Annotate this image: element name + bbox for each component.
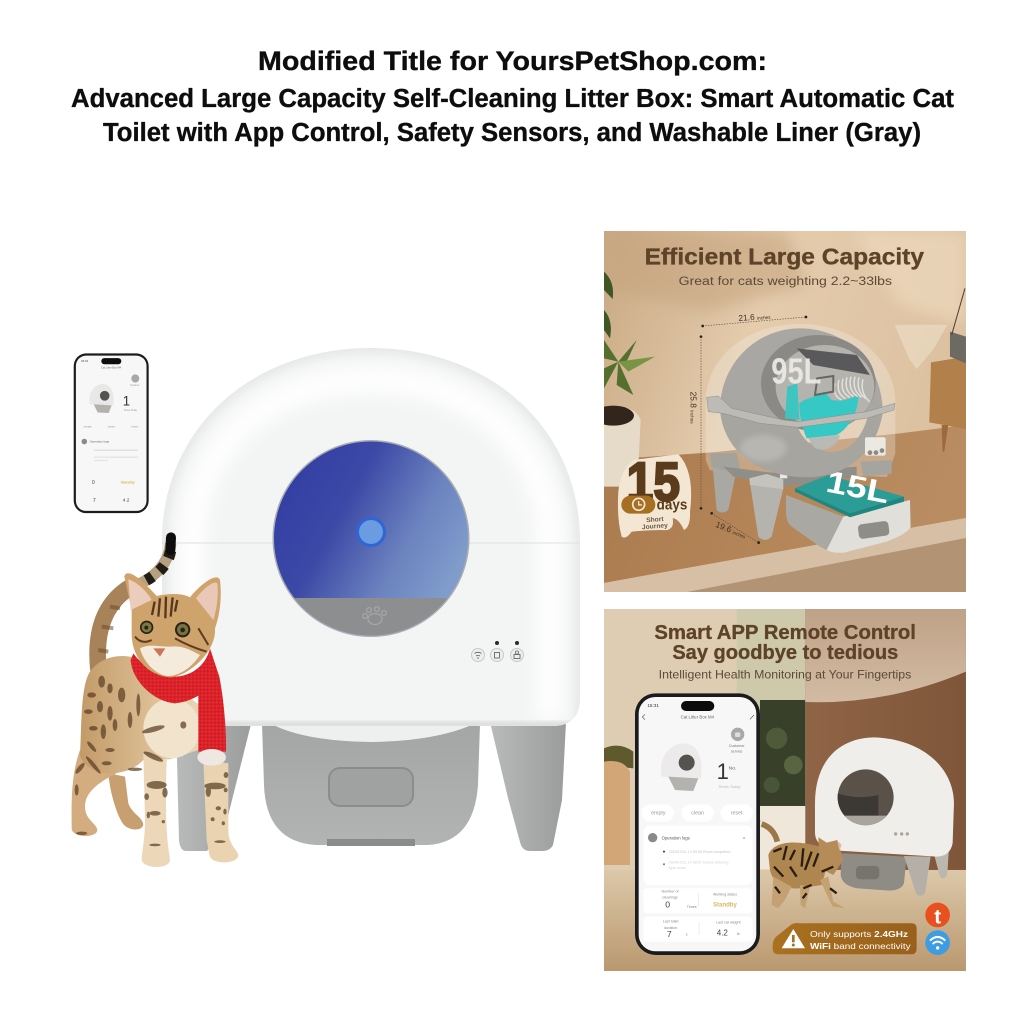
wood wall: [805, 609, 966, 871]
blue button: [356, 517, 386, 547]
panel: efficient large capacity: [593, 231, 966, 592]
phone app mockup: clean: [108, 424, 115, 429]
coat spots: [74, 676, 228, 846]
15 days badge: Short: [646, 516, 665, 524]
drawer handle: [329, 768, 413, 806]
cat with red scarf: [72, 537, 238, 867]
times today: [717, 759, 741, 789]
mini litter box: [815, 737, 954, 896]
panel heading: [654, 621, 916, 664]
times today: No.: [729, 765, 736, 771]
15 days badge: Journey: [642, 522, 668, 531]
title: [71, 46, 955, 147]
near hind leg: [72, 733, 117, 836]
status cards: Last toilet: [663, 920, 678, 924]
95L label: 95L: [771, 350, 821, 391]
operation logs: 2024/12/11 14 58:07 Device entering: [669, 861, 728, 865]
wifi warning badge: Only supports 2.4GHz: [810, 929, 909, 939]
rim: [707, 396, 895, 427]
phone app mockup: Operation logs: [90, 440, 110, 444]
table front: [687, 538, 966, 592]
action buttons: clean: [691, 811, 704, 817]
title: Modified Title for YoursPetShop.com:: [258, 46, 767, 76]
front leg left: [142, 753, 170, 867]
top curved overlay: [805, 609, 966, 702]
mini product image: [661, 743, 702, 791]
drawer 15L: [786, 465, 911, 553]
dimension: width: 21.6 inches: [738, 311, 771, 323]
operation logs: 2024/12/11 14 59:05 Reset completed: [669, 850, 730, 854]
sofa: [604, 746, 633, 865]
15 days badge: [618, 450, 691, 538]
status cards: 0: [665, 899, 670, 909]
wall background: [604, 231, 966, 592]
dimension: width: [701, 314, 808, 328]
phone app mockup: reset: [131, 424, 138, 429]
customer service: service: [731, 749, 742, 753]
status bar: 15:31: [647, 703, 659, 708]
potted plant: [604, 272, 655, 487]
action buttons: reset: [731, 811, 743, 817]
legs: [713, 467, 737, 512]
lower bowl: [720, 410, 883, 477]
operation logs: Operation logs: [662, 835, 690, 840]
control buttons: [472, 641, 524, 662]
times today: 1: [717, 759, 729, 784]
15 days badge: days: [657, 498, 687, 514]
valves: [861, 437, 892, 477]
phone app mockup: 7: [93, 498, 96, 504]
room background: [604, 609, 806, 870]
phone app mockup: 0: [92, 480, 95, 486]
dimension: depth: [710, 512, 760, 544]
wifi logo: [925, 930, 950, 955]
tuya logo: [925, 903, 950, 928]
status cards: Number of: [661, 890, 680, 894]
panel subheading: Intelligent Health Monitoring at Your Fingertips: [659, 668, 911, 681]
wood table top: [604, 425, 966, 583]
phone app mockup: [635, 693, 760, 955]
phone app mockup: 1: [123, 394, 130, 409]
tail: [98, 537, 171, 668]
comb: [815, 376, 870, 402]
phone app mockup: 15:31: [81, 359, 89, 363]
floor: [604, 870, 966, 972]
action buttons: empty: [651, 811, 666, 817]
status cards: Working status: [713, 893, 737, 897]
status cards: Standby: [713, 903, 737, 909]
hanging glass shade: [894, 324, 948, 370]
drawer white band: [268, 722, 478, 742]
waste drawer: [262, 724, 480, 845]
status cards: Last cat weight: [716, 920, 741, 924]
wifi warning badge: [773, 923, 917, 954]
walking cat: [760, 820, 844, 908]
phone app mockup: [74, 353, 149, 513]
dome body: [162, 348, 580, 726]
status cards: cleanings: [662, 895, 678, 899]
times today: Times Today: [718, 784, 741, 789]
tuya logo: t: [934, 905, 941, 928]
wifi warning badge: WiFi band connectivity: [810, 941, 911, 951]
body seam: [162, 542, 580, 544]
panel heading: Smart APP Remote Control: [654, 621, 916, 644]
far hind leg: [108, 773, 143, 829]
operation logs: type mode: [669, 866, 686, 870]
front leg right: [203, 760, 238, 862]
phone app mockup: 4.2: [123, 497, 130, 503]
scarf: [131, 648, 226, 766]
paw icon: [363, 607, 386, 624]
operation logs: [643, 826, 753, 885]
status cards: 4.2: [717, 929, 728, 938]
table edge: [604, 518, 966, 592]
torso: [80, 656, 202, 773]
mini product: [89, 384, 114, 413]
main product: litter box: [150, 348, 590, 851]
base: [710, 453, 740, 470]
upper drum: [720, 328, 883, 425]
dimension: depth: 19.6 inches: [714, 519, 748, 541]
left leg: [176, 720, 252, 851]
action buttons: [642, 804, 753, 822]
customer service: [729, 728, 745, 753]
status cards: s: [686, 933, 688, 937]
head: [124, 573, 221, 677]
phone app mockup: Times Today: [124, 409, 138, 412]
title: Advanced Large Capacity Self-Cleaning Litter Box: Smart Automatic Cat: [71, 85, 955, 113]
operation logs: >: [743, 835, 746, 840]
dimension: height: 25.8 inches: [689, 392, 699, 424]
title: Toilet with App Control, Safety Sensors, and Washable Liner (Gray): [103, 119, 921, 147]
status cards: lb: [737, 932, 740, 936]
phone app mockup: empty: [84, 424, 92, 429]
status cards: [643, 888, 753, 942]
teal liner: [785, 383, 799, 420]
status cards: 7: [667, 929, 672, 939]
panel heading: Efficient Large Capacity: [645, 243, 924, 269]
phone app mockup: Cat Litter Box M4: [101, 366, 122, 370]
customer service: Customer: [729, 744, 745, 748]
entry window: [270, 440, 470, 648]
15 days badge: 15: [627, 450, 680, 512]
panel: smart app remote control: [604, 609, 966, 972]
outdoor window: [737, 609, 805, 869]
wood cabinet: [929, 288, 966, 452]
chest: [143, 698, 200, 758]
phone app mockup: Standby: [121, 481, 135, 485]
phone app mockup: Customer: [130, 384, 140, 387]
panel subheading: Great for cats weighting 2.2~33lbs: [679, 274, 892, 288]
panel heading: Say goodbye to tedious: [672, 641, 898, 664]
drawer 15L: 15L: [823, 465, 892, 510]
status cards: Times: [687, 905, 697, 909]
product group: [706, 324, 911, 553]
status cards: duration: [664, 926, 677, 930]
app header: Cat Litter Box M4: [681, 714, 715, 719]
right leg: [490, 722, 566, 851]
transparent dome: [706, 324, 895, 477]
